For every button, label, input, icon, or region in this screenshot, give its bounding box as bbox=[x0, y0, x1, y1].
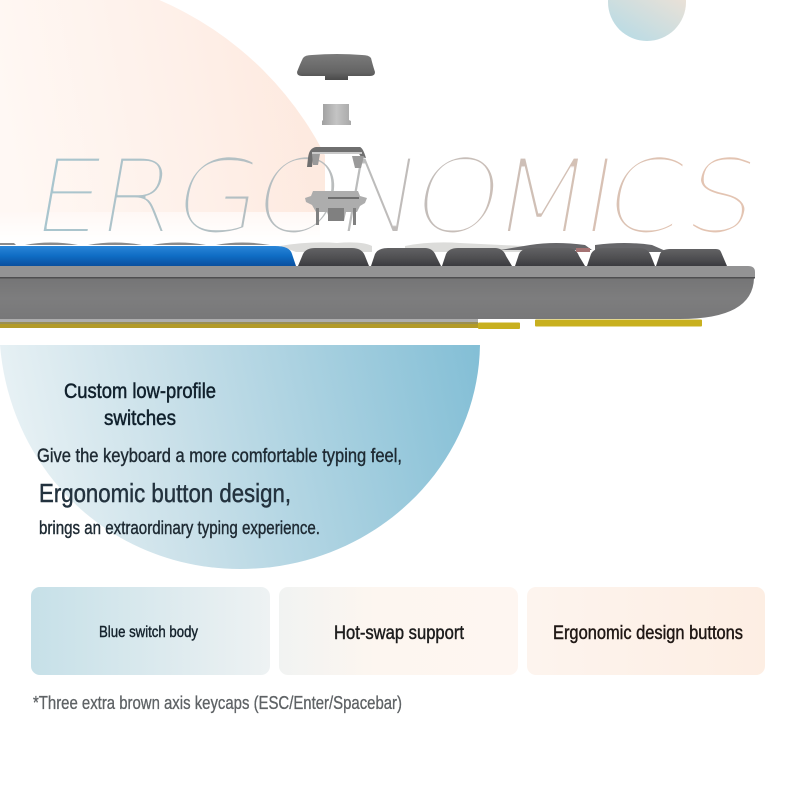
heading line 1: Custom low-profile bbox=[64, 380, 216, 403]
peach fade band below circle bbox=[0, 212, 320, 242]
keycap bbox=[297, 54, 375, 80]
stabilizer wires bbox=[312, 152, 362, 154]
decorative small circle bbox=[608, 0, 686, 41]
decorative blue semicircle bbox=[0, 345, 480, 569]
card: hot-swap support: Hot-swap support bbox=[334, 623, 465, 644]
keyboard side view bbox=[0, 242, 755, 329]
dark keys bbox=[298, 248, 369, 266]
card: hot-swap support bbox=[279, 587, 518, 675]
dark rear keys bbox=[500, 243, 668, 252]
yellow foot middle bbox=[478, 322, 520, 329]
seam line bbox=[0, 277, 755, 278]
bottom edge bbox=[0, 319, 478, 322]
switch housing detail bbox=[328, 197, 359, 199]
card: blue switch body bbox=[31, 587, 270, 675]
keyboard top plate bbox=[0, 266, 755, 278]
card: blue switch body: Blue switch body bbox=[99, 624, 198, 641]
stabilizer clips bbox=[312, 154, 364, 168]
switch stem bbox=[322, 104, 351, 125]
keyboard body lower bbox=[0, 278, 754, 319]
body line 2: brings an extraordinary typing experience. bbox=[39, 518, 320, 538]
decorative peach circle bbox=[0, 0, 325, 212]
card: ergonomic design buttons: Ergonomic design buttons bbox=[553, 623, 743, 644]
card: ergonomic design buttons bbox=[527, 587, 765, 675]
body line 1: Give the keyboard a more comfortable typing feel, bbox=[37, 446, 402, 467]
stabilizer frame bbox=[307, 147, 366, 167]
yellow strip long bbox=[0, 324, 478, 328]
blue key bbox=[0, 246, 296, 266]
title word ERGONOMICS: ERGONOMICS bbox=[24, 138, 768, 257]
emphasis line: Ergonomic button design, bbox=[39, 478, 291, 508]
yellow foot right bbox=[535, 320, 702, 326]
switch housing bbox=[305, 191, 367, 221]
main text block bbox=[37, 380, 402, 538]
exploded keycap icon bbox=[297, 54, 375, 225]
red accent bbox=[576, 248, 590, 252]
footnote: *Three extra brown axis keycaps (ESC/Enter/Spacebar) bbox=[33, 693, 402, 713]
heading line 2: switches bbox=[104, 407, 176, 430]
light rear keys bbox=[280, 242, 523, 252]
switch pins and post bbox=[316, 208, 356, 225]
olive transition strip bbox=[0, 322, 478, 324]
rear key row bbox=[0, 242, 270, 245]
